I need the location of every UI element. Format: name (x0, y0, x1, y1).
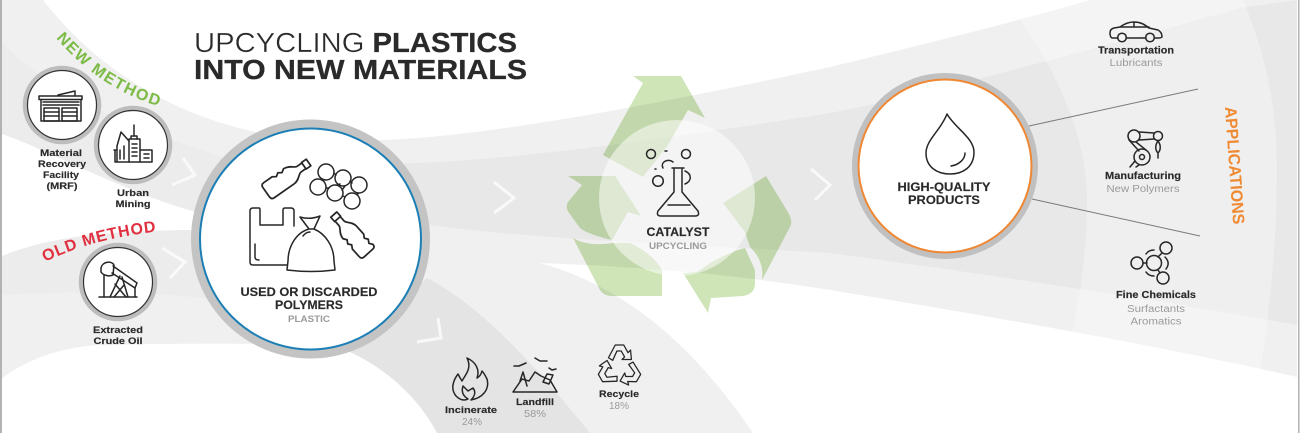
icon: city (114, 125, 152, 162)
label: catalyst: UPCYCLING (649, 241, 707, 252)
title: INTO NEW MATERIALS (194, 54, 527, 85)
source: crude oil (81, 245, 155, 347)
label: polymers: PLASTIC (288, 314, 331, 324)
label: crude oil (93, 325, 143, 347)
icon: facility (39, 91, 82, 121)
source: material recovery facility (25, 68, 99, 192)
label: incinerate: Incinerate (445, 405, 497, 416)
icon: bottle (261, 155, 314, 200)
label: fine chemicals: Surfactants (1127, 304, 1185, 315)
label: products: HIGH-QUALITY (898, 180, 990, 194)
label: landfill: Landfill (516, 397, 554, 408)
icon: landfill heap (513, 358, 557, 392)
icon: molecule (1131, 242, 1172, 284)
label: MRF: Material (40, 148, 82, 159)
panel: catalyst recycling arrows (567, 76, 791, 313)
catalyst circle (599, 120, 755, 276)
application: manufacturing (1105, 130, 1181, 195)
label: transportation: Lubricants (1110, 58, 1162, 69)
arrow: left (567, 176, 641, 240)
label: urban mining (116, 188, 151, 210)
icon: pump jack (99, 262, 137, 297)
label: products (898, 180, 990, 207)
label: fine chemicals: Aromatics (1130, 316, 1182, 328)
panel: incinerate (445, 358, 497, 428)
label: polymers: USED OR DISCARDED (240, 285, 378, 299)
label: polymers (240, 285, 378, 324)
label: landfill (516, 397, 554, 420)
label: urban mining: Urban (117, 188, 149, 199)
label: MRF: Facility (43, 170, 80, 181)
label: catalyst: CATALYST (646, 225, 710, 239)
title: UPCYCLING PLASTICS (194, 27, 517, 58)
icon: drop (926, 114, 974, 174)
icon: flame (453, 358, 488, 400)
label: manufacturing (1105, 171, 1181, 195)
label: recycle: 18% (609, 401, 629, 412)
new method label: NEW METHOD (56, 32, 160, 105)
label: manufacturing: New Polymers (1106, 184, 1180, 195)
title (194, 27, 527, 85)
icon: car (1110, 22, 1162, 42)
arrow: top (603, 76, 705, 177)
flow chevrons (162, 158, 830, 342)
icon: garbage bag (287, 216, 335, 272)
icon: recycle arrows (594, 345, 644, 388)
icon: flask (646, 150, 699, 216)
icon: six-pack rings (310, 164, 367, 209)
panel: high-quality products (852, 73, 1038, 259)
right page edge (1298, 0, 1300, 433)
panel: recycle (594, 345, 644, 412)
label: incinerate (445, 405, 497, 428)
arrow: right (723, 176, 791, 280)
label: incinerate: 24% (462, 417, 482, 428)
arrow: lower left (573, 238, 662, 296)
label: crude oil: Extracted (93, 325, 143, 336)
icon: plastic bag (250, 208, 294, 265)
label: MRF: Recovery (38, 159, 87, 170)
label: products: PRODUCTS (908, 193, 980, 207)
panel: landfill (513, 358, 557, 420)
label: fine chemicals (1116, 290, 1196, 328)
label: MRF: (MRF) (46, 181, 78, 192)
label: fine chemicals: Fine Chemicals (1116, 290, 1196, 301)
source: urban mining (96, 108, 170, 210)
label: crude oil: Crude Oil (94, 336, 142, 347)
label: MRF (38, 148, 87, 192)
icon: robot arm (1128, 130, 1162, 167)
icon: bottle (327, 208, 375, 259)
label: recycle: Recycle (599, 389, 639, 400)
arrow: bottom (683, 248, 755, 313)
label: manufacturing: Manufacturing (1105, 171, 1181, 182)
label: transportation (1098, 46, 1174, 69)
panel: used or discarded polymers (191, 120, 430, 358)
label: transportation: Transportation (1098, 46, 1174, 56)
application divider lines (1029, 89, 1200, 236)
left page edge (0, 0, 2, 433)
application: transportation (1098, 22, 1174, 69)
label: landfill: 58% (524, 408, 546, 420)
label: polymers: POLYMERS (275, 298, 343, 312)
label: recycle (599, 389, 639, 412)
application: fine chemicals (1116, 242, 1196, 328)
applications label: APPLICATIONS (1221, 106, 1247, 225)
label: urban mining: Mining (116, 199, 151, 210)
label: catalyst (646, 225, 710, 252)
old method label: OLD METHOD (42, 222, 155, 260)
